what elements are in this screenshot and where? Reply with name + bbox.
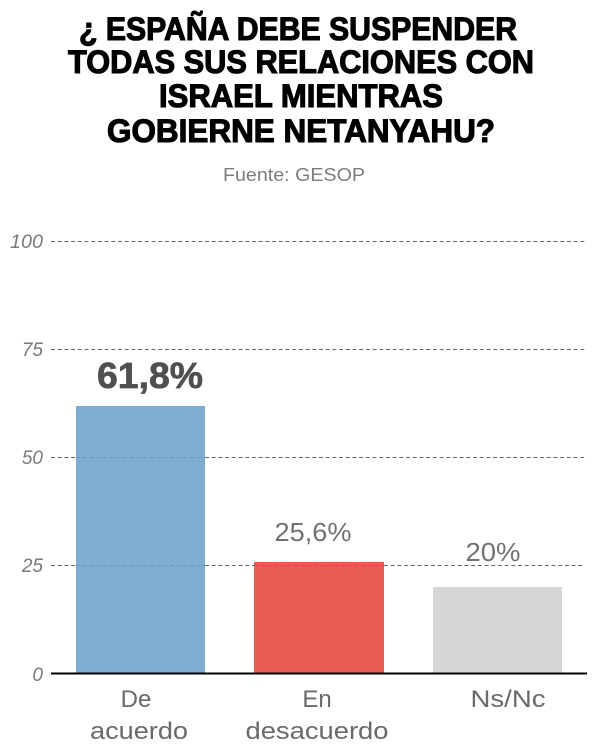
category labels: En xyxy=(302,686,332,713)
title xyxy=(68,11,534,149)
y axis labels: 0 xyxy=(32,665,43,686)
bar: De acuerdo xyxy=(76,406,205,673)
category labels xyxy=(90,686,546,745)
y axis labels xyxy=(10,232,43,686)
value: 61,8%: 61,8% xyxy=(97,355,203,396)
title: ¿ ESPAÑA DEBE SUSPENDER xyxy=(79,11,517,47)
bar: Ns/Nc xyxy=(433,587,562,673)
category labels: desacuerdo xyxy=(246,718,388,745)
y axis labels: 75 xyxy=(22,340,43,361)
value: 25,6%: 25,6% xyxy=(274,517,352,547)
y axis labels: 50 xyxy=(22,448,43,469)
title: TODAS SUS RELACIONES CON xyxy=(68,44,534,80)
y axis labels: 25 xyxy=(21,556,43,577)
category labels: Ns/Nc xyxy=(470,686,546,713)
value: 20%: 20% xyxy=(466,537,520,567)
y axis labels: 100 xyxy=(10,232,43,253)
bar: En desacuerdo xyxy=(254,562,384,673)
category labels: De xyxy=(121,686,151,713)
category labels: acuerdo xyxy=(90,718,188,745)
title: GOBIERNE NETANYAHU? xyxy=(107,113,495,149)
source: Fuente: GESOP xyxy=(223,165,365,185)
title: ISRAEL MIENTRAS xyxy=(159,78,443,114)
